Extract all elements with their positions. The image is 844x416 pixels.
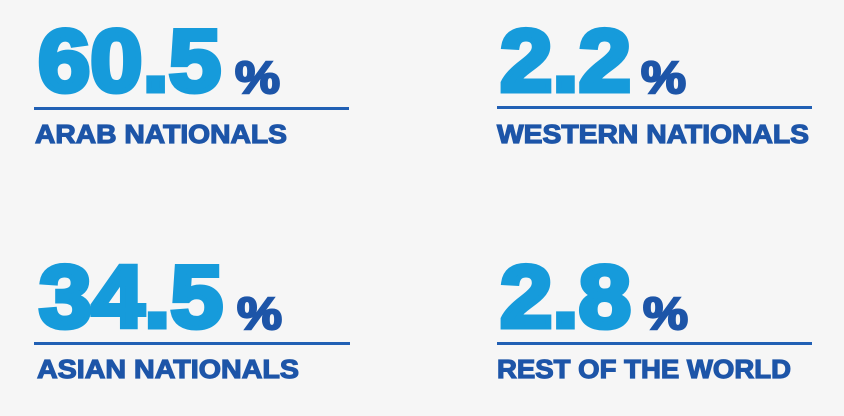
value: 2.2: 2.2 bbox=[500, 11, 631, 110]
rule bbox=[497, 106, 812, 109]
label: Arab nationals: ARAB NATIONALS bbox=[35, 119, 287, 149]
value: 2.8: 2.8 bbox=[500, 247, 631, 346]
value: 60.5: 60.5 bbox=[38, 11, 221, 110]
percent sign: % bbox=[235, 52, 280, 103]
panel: Western nationals bbox=[497, 11, 812, 149]
label: Western nationals: WESTERN NATIONALS bbox=[497, 119, 809, 149]
panel: Arab nationals bbox=[34, 11, 349, 149]
panel: Rest of the world bbox=[497, 247, 812, 384]
percent sign: % bbox=[643, 288, 688, 339]
percent sign: % bbox=[237, 288, 282, 339]
panel: Asian nationals bbox=[34, 247, 350, 384]
label: Asian nationals: ASIAN NATIONALS bbox=[37, 354, 299, 384]
rule bbox=[497, 342, 812, 345]
value: 34.5: 34.5 bbox=[39, 247, 223, 346]
rule bbox=[34, 342, 350, 345]
percent sign: % bbox=[641, 52, 686, 103]
rule bbox=[34, 107, 349, 110]
label: Rest of the world: REST OF THE WORLD bbox=[497, 354, 791, 384]
